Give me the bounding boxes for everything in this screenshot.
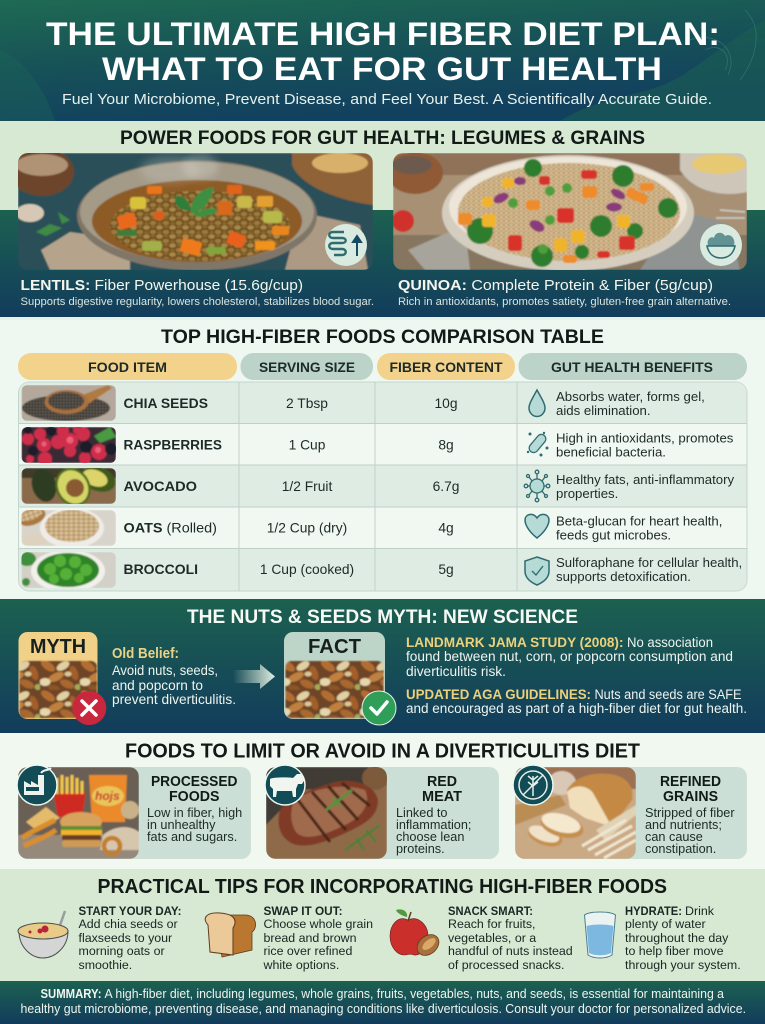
panel: foods to limit <box>18 744 747 859</box>
row: raspberries: High in antioxidants, promotes <box>556 430 734 446</box>
row: chia seeds <box>22 385 705 421</box>
header band <box>0 0 765 121</box>
row: oats: Beta-glucan for heart health, <box>556 514 722 528</box>
caption: lentils: LENTILS: Fiber Powerhouse (15.6g/cup) <box>20 278 303 294</box>
tip: hydrate: through your system. <box>625 958 741 972</box>
table header <box>18 353 747 380</box>
row: avocado: AVOCADO <box>124 479 197 494</box>
table body <box>16 382 747 592</box>
table header: FIBER CONTENT <box>390 360 503 375</box>
row: raspberries: 8g <box>438 438 454 452</box>
card: processed foods: fats and sugars. <box>147 830 237 844</box>
table header: SERVING SIZE <box>259 360 355 375</box>
card: processed foods: PROCESSED <box>151 773 238 790</box>
panel: summary: A high-fiber diet, including legumes, whole grains, fruits, vegetables, nuts, and seeds, is essential for maintaining a <box>104 987 724 1001</box>
icon: heart <box>525 514 549 538</box>
row: raspberries <box>22 427 733 463</box>
tip: swap it out <box>262 904 373 972</box>
tip: swap it out: white options. <box>262 958 339 972</box>
row: oats: OATS (Rolled) <box>124 520 217 536</box>
row: raspberries: RASPBERRIES <box>124 438 222 452</box>
text: old belief: and popcorn to <box>112 678 203 693</box>
caption: lentils <box>20 278 374 308</box>
icon: bread <box>205 913 256 957</box>
table header: FOOD ITEM <box>88 360 167 375</box>
card: myth: MYTH <box>30 636 86 658</box>
row: broccoli: supports detoxification. <box>556 569 691 584</box>
icon: water glass <box>584 912 616 958</box>
tip: hydrate <box>625 904 741 972</box>
title: WHAT TO EAT FOR GUT HEALTH <box>102 51 662 87</box>
heading: power foods: POWER FOODS FOR GUT HEALTH: LEGUMES & GRAINS <box>120 127 645 149</box>
heading: comparison table: TOP HIGH-FIBER FOODS COMPARISON TABLE <box>161 326 604 348</box>
card: fact: FACT <box>308 636 361 658</box>
row: chia seeds: Absorbs water, forms gel, <box>556 389 705 404</box>
card: refined grains: Stripped of fiber <box>645 806 735 820</box>
tip: start your day: START YOUR DAY: <box>78 904 182 918</box>
tip: snack smart: SNACK SMART: <box>448 904 533 918</box>
text: old belief <box>112 646 236 707</box>
table header: GUT HEALTH BENEFITS <box>551 360 713 375</box>
row: chia seeds: 10g <box>434 396 458 411</box>
text: old belief: Old Belief: <box>112 646 179 662</box>
row: oats: 1/2 Cup (dry) <box>267 520 347 536</box>
text: JAMA study <box>406 635 733 679</box>
tip: swap it out: rice over refined <box>264 944 352 958</box>
panel: practical tips <box>0 869 765 981</box>
subtitle: Fuel Your Microbiome, Prevent Disease, and Feel Your Best. A Scientifically Accurate Guide. <box>62 91 712 108</box>
text: JAMA study: diverticulitis risk. <box>406 664 506 679</box>
photo: lentil soup <box>10 148 373 270</box>
icon: cow <box>265 765 305 805</box>
text: AGA guidelines: Nuts and seeds are SAFE <box>594 687 742 702</box>
tip: snack smart: handful of nuts instead <box>448 944 573 958</box>
text: JAMA study: LANDMARK JAMA STUDY (2008): <box>406 635 624 650</box>
tip: snack smart <box>448 904 573 972</box>
tip: start your day <box>78 904 182 972</box>
row: oats: feeds gut microbes. <box>556 528 671 542</box>
row: broccoli: BROCCOLI <box>124 562 198 577</box>
tip: start your day: Add chia seeds or <box>78 917 178 931</box>
card: processed foods: hojs <box>95 789 120 803</box>
row: chia seeds: CHIA SEEDS <box>124 396 208 411</box>
card: red meat: RED <box>427 773 457 790</box>
heading: foods to limit: FOODS TO LIMIT OR AVOID IN A DIVERTICULITIS DIET <box>125 740 640 762</box>
row: avocado: 6.7g <box>433 479 459 494</box>
tip: snack smart: of processed snacks. <box>448 958 564 972</box>
row: broccoli: Sulforaphane for cellular health, <box>556 555 742 570</box>
card: processed foods: in unhealthy <box>147 818 216 832</box>
tip: snack smart: vegetables, or a <box>448 931 536 945</box>
panel: summary <box>0 981 765 1024</box>
card: refined grains: and nutrients; <box>645 818 722 832</box>
tip: hydrate: plenty of water <box>625 917 706 931</box>
card: fact <box>284 632 396 725</box>
row: raspberries: beneficial bacteria. <box>556 444 666 460</box>
tip: snack smart: Reach for fruits, <box>448 917 535 931</box>
card: refined grains <box>513 765 747 859</box>
icon: no grain <box>513 765 553 805</box>
icon: green check <box>362 691 396 725</box>
icon: apple and nut <box>390 909 443 960</box>
card: processed foods <box>17 765 251 859</box>
row: chia seeds: aids elimination. <box>556 403 651 418</box>
tip: hydrate: Drink <box>685 904 715 918</box>
card: myth <box>18 632 106 725</box>
card: processed foods: Low in fiber, high <box>147 806 242 820</box>
row: avocado: Healthy fats, anti-inflammatory <box>556 472 735 487</box>
card: red meat <box>265 765 499 859</box>
text: old belief: prevent diverticulitis. <box>112 692 236 707</box>
icon: intestine with arrow <box>325 224 367 266</box>
panel: nuts and seeds myth <box>0 599 765 733</box>
row: oats <box>22 510 722 546</box>
icon: water drop <box>529 390 545 416</box>
caption: lentils: Supports digestive regularity, lowers cholesterol, stabilizes blood sugar. <box>20 296 374 308</box>
title: THE ULTIMATE HIGH FIBER DIET PLAN: <box>46 16 720 52</box>
photo: quinoa bowl <box>387 152 747 271</box>
card: refined grains: REFINED <box>660 773 721 790</box>
caption: quinoa: QUINOA: Complete Protein & Fiber (5g/cup) <box>398 278 713 294</box>
text: AGA guidelines: UPDATED AGA GUIDELINES: <box>406 687 591 702</box>
panel: comparison table <box>18 330 748 592</box>
tip: start your day: morning oats or <box>78 944 165 958</box>
icon: red cross <box>72 691 106 725</box>
row: broccoli: 1 Cup (cooked) <box>260 562 354 577</box>
row: avocado: properties. <box>556 486 618 501</box>
icon: oatmeal bowl <box>18 911 68 958</box>
arrow <box>233 664 275 689</box>
icon: factory <box>17 765 57 805</box>
tip: start your day: smoothie. <box>78 958 132 972</box>
panel: summary: healthy gut microbiome, preventing disease, and managing conditions like diverticulosis. Consult your doctor for personalized advice. <box>20 1002 746 1016</box>
caption: quinoa <box>398 278 731 308</box>
row: avocado <box>22 468 734 504</box>
text: old belief: Avoid nuts, seeds, <box>112 663 218 678</box>
panel: summary: SUMMARY: <box>40 987 102 1001</box>
text: JAMA study: No association <box>627 635 713 650</box>
panel: power foods <box>0 121 765 320</box>
card: red meat: choose lean <box>396 830 464 844</box>
row: chia seeds: 2 Tbsp <box>286 396 328 411</box>
card: refined grains: constipation. <box>645 842 716 856</box>
row: broccoli: 5g <box>438 562 454 577</box>
tip: hydrate: throughout the day <box>625 931 729 945</box>
text: JAMA study: found between nut, corn, or popcorn consumption and <box>406 649 733 664</box>
tip: swap it out: Choose whole grain <box>264 917 373 931</box>
text: AGA guidelines <box>406 687 747 716</box>
row: avocado: 1/2 Fruit <box>282 479 332 494</box>
card: refined grains: GRAINS <box>663 788 718 805</box>
card: red meat: inflammation; <box>396 818 471 832</box>
text: AGA guidelines: and encouraged as part of a high-fiber diet for gut health. <box>406 701 747 716</box>
icon: bacteria <box>527 432 548 456</box>
row: broccoli <box>22 552 741 588</box>
card: red meat: Linked to <box>396 806 448 820</box>
tip: hydrate: to help fiber move <box>625 944 724 958</box>
tip: hydrate: HYDRATE: <box>625 904 682 918</box>
icon: shield check <box>525 557 549 585</box>
row: oats: 4g <box>438 520 454 536</box>
card: red meat: proteins. <box>396 842 445 856</box>
icon: anti-inflammatory cell <box>524 470 550 502</box>
heading: practical tips: PRACTICAL TIPS FOR INCORPORATING HIGH-FIBER FOODS <box>98 876 667 898</box>
caption: quinoa: Rich in antioxidants, promotes satiety, gluten-free grain alternative. <box>398 296 731 308</box>
tip: start your day: flaxseeds to your <box>78 931 172 945</box>
icon: salad bowl <box>700 224 742 266</box>
card: refined grains: can cause <box>645 830 703 844</box>
tip: swap it out: bread and brown <box>264 931 357 945</box>
heading: nuts and seeds myth: THE NUTS & SEEDS MYTH: NEW SCIENCE <box>187 606 578 628</box>
row: raspberries: 1 Cup <box>289 438 326 452</box>
title <box>46 16 720 87</box>
card: processed foods: FOODS <box>169 788 220 805</box>
card: red meat: MEAT <box>422 788 462 805</box>
tip: swap it out: SWAP IT OUT: <box>264 904 342 918</box>
